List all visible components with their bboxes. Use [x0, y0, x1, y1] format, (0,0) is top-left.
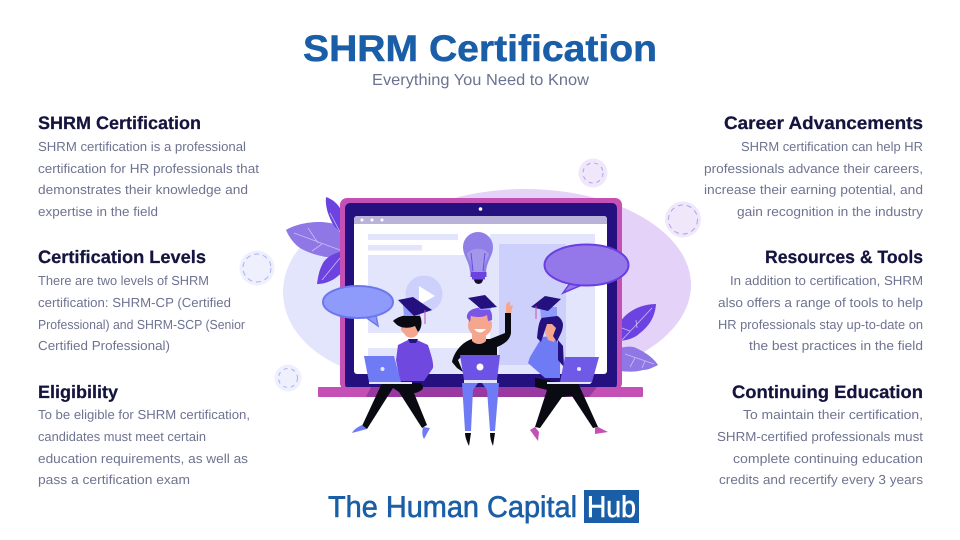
text block: Eligibility description: To be eligible for SHRM certification, [38, 407, 250, 422]
speech bubble: right [544, 244, 628, 293]
heading: SHRM Certification: SHRM Certification [38, 113, 201, 133]
text block: Certification Levels description [38, 273, 246, 353]
text block: Eligibility description: education requirements, as well as [38, 451, 249, 466]
panel: Resources & Tools [718, 247, 923, 353]
decorative dashed circle: left small [274, 364, 302, 392]
subtitle: Everything You Need to Know [372, 72, 589, 89]
text block: Continuing Education description: SHRM-certified professionals must [717, 429, 923, 444]
text block: Continuing Education description: credits and recertify every 3 years [719, 472, 924, 487]
text block: Certification Levels description: There are two levels of SHRM [38, 273, 209, 288]
person: boy with laptop [352, 297, 433, 439]
text block: Certification Levels description: Certified Professional) [38, 338, 170, 353]
text block: SHRM Certification description: demonstrates their knowledge and [38, 182, 248, 197]
panel: Career Advancements [704, 113, 924, 219]
person: woman with laptop [528, 296, 608, 441]
text block: Eligibility description: candidates must meet certain [38, 429, 206, 444]
decorative dashed circle: left large [240, 250, 274, 286]
title: SHRM Certification [303, 28, 657, 69]
text block: Continuing Education description: To maintain their certification, [743, 407, 923, 422]
text block: Continuing Education description [717, 407, 924, 487]
text block: Certification Levels description: certification: SHRM-CP (Certified [38, 295, 231, 310]
text block: Career Advancements description [704, 139, 924, 219]
logo wordmark: The Human Capital [328, 491, 577, 524]
text block: Career Advancements description: gain recognition in the industry [737, 204, 924, 219]
logo box: Hub: Hub [587, 491, 636, 524]
heading: Continuing Education: Continuing Education [732, 382, 923, 402]
panel: SHRM Certification [38, 113, 259, 219]
background blob: lilac [359, 189, 691, 381]
text block: Continuing Education description: complete continuing education [733, 451, 923, 466]
text block: Resources & Tools description: In addition to certification, SHRM [730, 273, 923, 288]
text block: Resources & Tools description: HR professionals stay up-to-date on [718, 317, 923, 332]
text block: Career Advancements description: professionals advance their careers, [704, 161, 923, 176]
text block: SHRM Certification description: expertise in the field [38, 204, 158, 219]
speech bubble: left [323, 286, 393, 326]
heading: Eligibility: Eligibility [38, 382, 118, 402]
panel: Eligibility [38, 382, 250, 487]
panel: Certification Levels [38, 247, 246, 353]
heading: Career Advancements: Career Advancements [724, 113, 923, 133]
text block: SHRM Certification description [38, 139, 259, 219]
person: man waving [452, 295, 513, 446]
text block: SHRM Certification description: certification for HR professionals that [38, 161, 259, 176]
text block: Career Advancements description: SHRM certification can help HR [741, 139, 923, 154]
laptop [318, 198, 643, 397]
icon: light bulb [463, 232, 493, 284]
text block: Resources & Tools description [718, 273, 923, 353]
heading: Resources & Tools: Resources & Tools [765, 247, 923, 267]
background blob: lavender [283, 206, 517, 378]
text block: Eligibility description [38, 407, 250, 487]
icon: right leaves [620, 304, 658, 372]
icon: left leaves [286, 197, 344, 284]
heading: Certification Levels: Certification Levels [38, 247, 206, 267]
text block: Eligibility description: pass a certification exam [38, 472, 190, 487]
decorative dashed circle: top right small [578, 158, 608, 188]
panel: Continuing Education [717, 382, 924, 487]
decorative dashed circle: top right large [665, 202, 701, 238]
illustration: students on laptop [283, 189, 691, 446]
logo: The Human Capital Hub [328, 490, 639, 524]
text block: Career Advancements description: increase their earning potential, and [704, 182, 923, 197]
text block: Resources & Tools description: the best practices in the field [749, 338, 923, 353]
text block: Certification Levels description: Professional) and SHRM-SCP (Senior [38, 317, 246, 332]
text block: SHRM Certification description: SHRM certification is a professional [38, 139, 246, 154]
text block: Resources & Tools description: also offers a range of tools to help [718, 295, 923, 310]
